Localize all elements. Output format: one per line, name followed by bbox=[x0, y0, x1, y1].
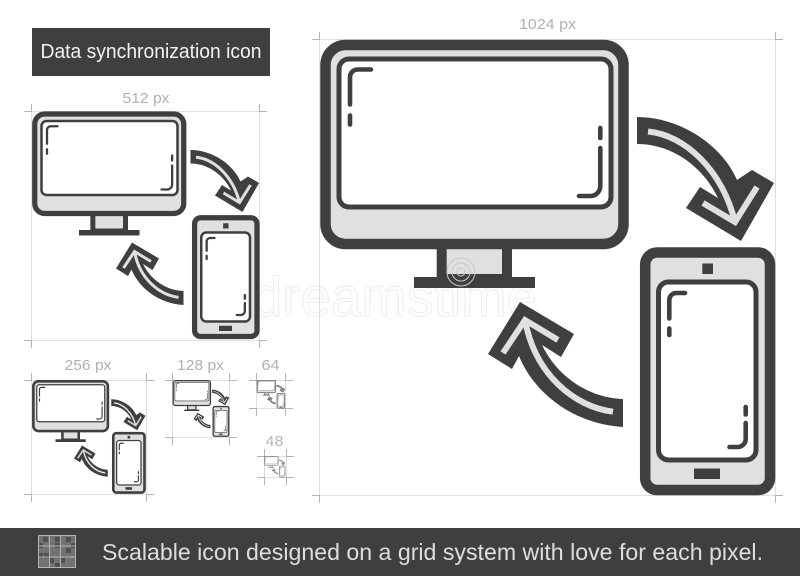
title: Data synchronization icon bbox=[40, 41, 262, 63]
watermark text: dreamstime bbox=[252, 265, 537, 328]
icon: pixel grid bbox=[38, 535, 76, 568]
icon: 128 px bbox=[173, 381, 229, 436]
label: 1024 px: 1024 px bbox=[519, 16, 577, 33]
256 guides bbox=[24, 373, 154, 502]
icon: 48 px bbox=[264, 456, 285, 477]
48 guides bbox=[257, 449, 294, 485]
icon: 1024 px monitor and phone sync bbox=[326, 45, 774, 490]
watermark spiral bbox=[447, 258, 475, 286]
title box bbox=[32, 28, 270, 76]
footer bar bbox=[0, 528, 800, 576]
big icon guides bbox=[312, 32, 783, 503]
footer text: Scalable icon designed on a grid system with love for each pixel. bbox=[102, 539, 763, 565]
128 guides bbox=[165, 373, 237, 445]
icon: 64 px bbox=[257, 380, 285, 408]
label: 256 px: 256 px bbox=[64, 357, 112, 374]
64 guides bbox=[249, 373, 293, 416]
label: 128 px: 128 px bbox=[177, 357, 225, 374]
label: 48: 48 bbox=[266, 433, 284, 450]
icon: 512 px bbox=[35, 114, 259, 336]
512 guides bbox=[24, 104, 267, 348]
icon: 256 px bbox=[33, 381, 146, 492]
label: 64: 64 bbox=[262, 357, 280, 374]
label: 512 px: 512 px bbox=[122, 90, 170, 107]
